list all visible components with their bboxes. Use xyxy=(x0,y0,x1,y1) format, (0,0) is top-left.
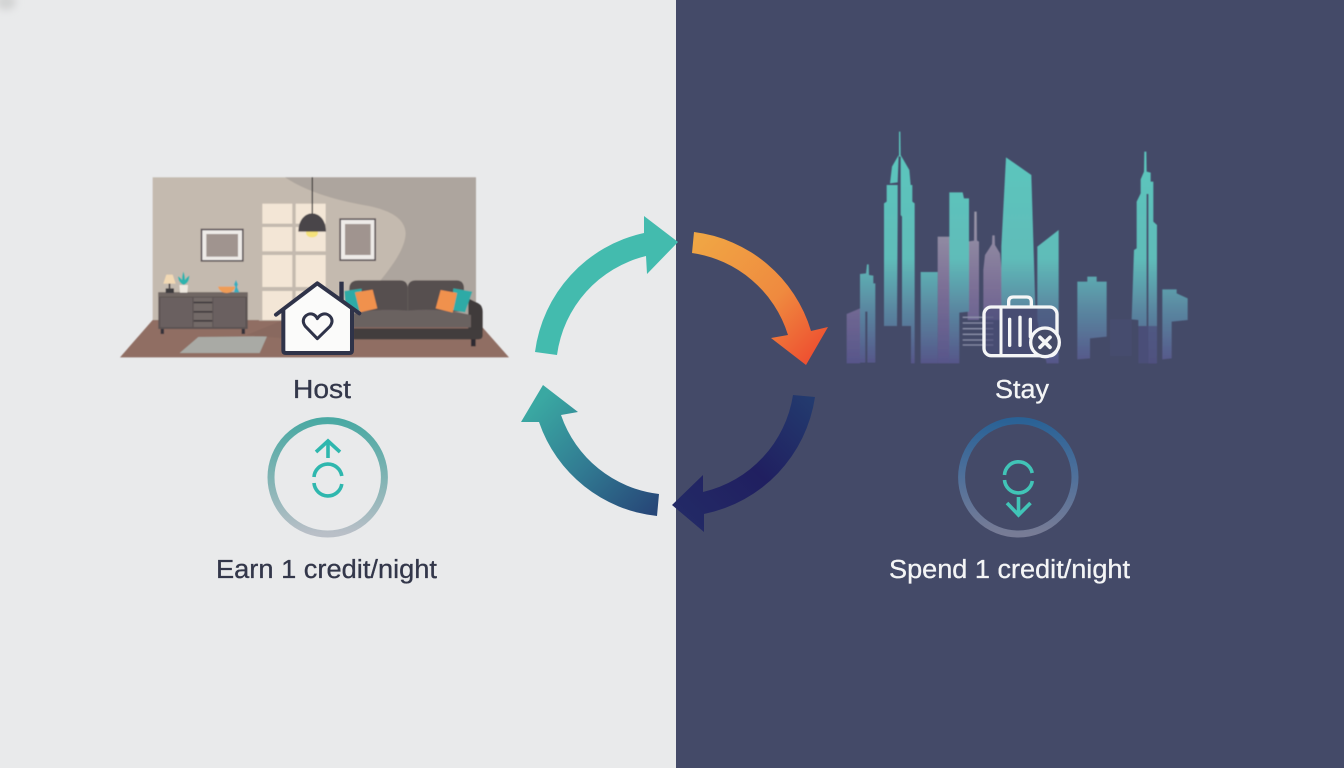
panel: stay background xyxy=(676,0,1344,768)
dark base blocks xyxy=(1110,319,1157,363)
purple mid-ground towers xyxy=(847,212,1002,363)
picture frame right xyxy=(339,218,376,261)
icon: spend cycle and arrow xyxy=(1004,462,1032,515)
illustration: living room xyxy=(120,177,509,357)
sideboard xyxy=(158,292,248,334)
ring: earn icon xyxy=(271,421,384,534)
rug xyxy=(180,336,267,353)
bowl and figurine xyxy=(218,280,239,293)
wall shadow xyxy=(285,177,476,321)
floor xyxy=(120,320,509,357)
heading: Host: Host xyxy=(293,376,351,404)
room wall xyxy=(153,177,476,321)
arrow: stay loop down xyxy=(692,232,828,365)
arrow: stay back to centre xyxy=(672,395,815,532)
ring: spend icon xyxy=(962,421,1075,534)
teal skyline towers xyxy=(860,132,1188,363)
text: spend credit: Spend 1 credit/night xyxy=(889,556,1130,584)
icon: suitcase with cancel badge xyxy=(984,297,1059,357)
floor shadow xyxy=(247,320,343,342)
icon: earn arrow and cycle xyxy=(314,441,342,496)
window xyxy=(259,200,327,321)
sofa xyxy=(344,280,483,346)
arrow: host to stay xyxy=(535,216,678,355)
illustration: city skyline xyxy=(847,132,1188,363)
heading: Stay: Stay xyxy=(995,376,1049,404)
pendant lamp xyxy=(298,177,326,237)
potted plant xyxy=(178,272,189,293)
stripes behind suitcase xyxy=(963,317,993,345)
skyline buildings xyxy=(847,132,1188,363)
arrow: return to host xyxy=(521,385,659,516)
room scene xyxy=(120,177,509,357)
panel: host background xyxy=(0,0,676,768)
icon: house with heart xyxy=(276,282,359,353)
table lamp xyxy=(163,275,176,293)
picture frame left xyxy=(201,229,244,262)
text: earn credit: Earn 1 credit/night xyxy=(216,556,437,584)
